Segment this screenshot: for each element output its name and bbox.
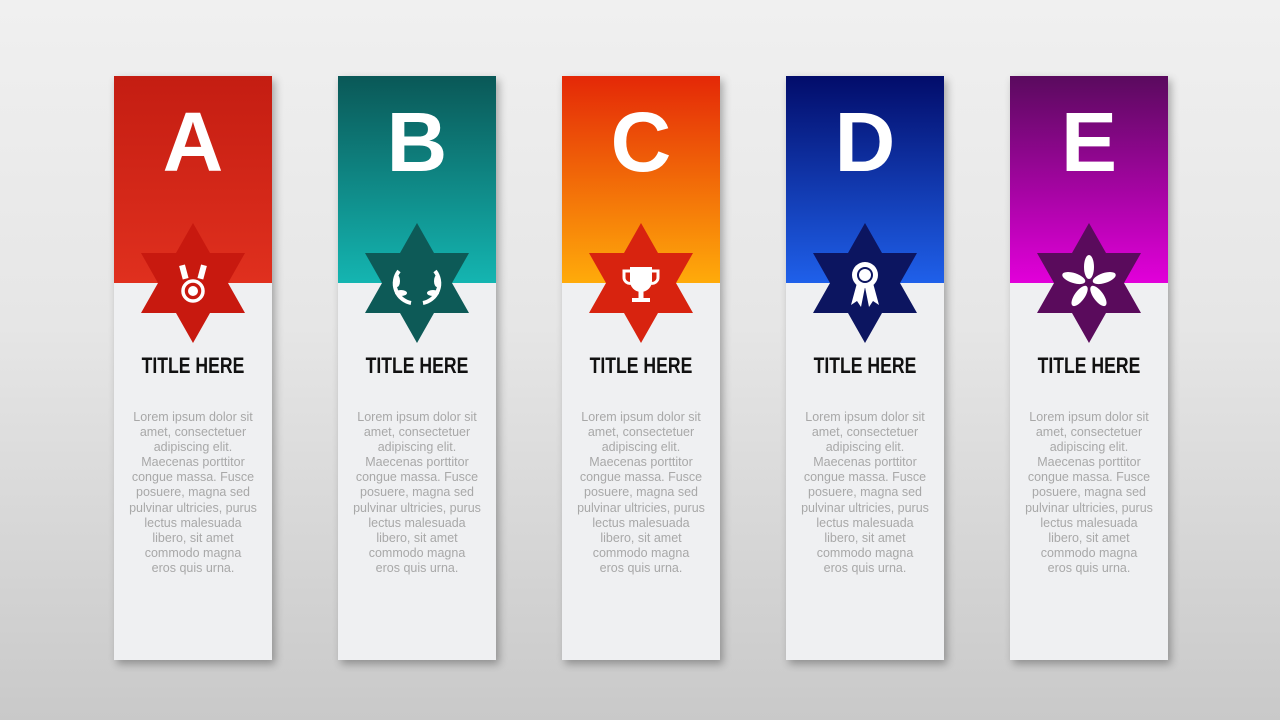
text D xyxy=(801,410,929,575)
text C: Maecenas porttitor xyxy=(589,455,693,469)
text C: amet, consectetuer xyxy=(588,425,694,439)
title E: TITLE HERE xyxy=(1038,353,1140,378)
card C xyxy=(562,76,720,660)
text D: amet, consectetuer xyxy=(812,425,918,439)
text A: Lorem ipsum dolor sit xyxy=(133,410,253,424)
text C: Lorem ipsum dolor sit xyxy=(581,410,701,424)
letter C: C xyxy=(611,95,671,189)
text C: eros quis urna. xyxy=(600,561,682,575)
letter B: B xyxy=(387,95,447,189)
text B: libero, sit amet xyxy=(376,531,458,545)
card A xyxy=(114,76,272,660)
header E xyxy=(1010,76,1168,283)
text D: posuere, magna sed xyxy=(808,485,922,499)
text A: amet, consectetuer xyxy=(140,425,246,439)
text A: eros quis urna. xyxy=(152,561,234,575)
text E: commodo magna xyxy=(1041,546,1137,560)
text C: posuere, magna sed xyxy=(584,485,698,499)
title B: TITLE HERE xyxy=(366,353,468,378)
text A: Maecenas porttitor xyxy=(141,455,245,469)
text D: eros quis urna. xyxy=(824,561,906,575)
text A: pulvinar ultricies, purus xyxy=(129,501,257,515)
header C xyxy=(562,76,720,283)
letter D: D xyxy=(835,95,895,189)
icon: star medal xyxy=(141,224,245,343)
text D: lectus malesuada xyxy=(816,516,914,530)
text E: posuere, magna sed xyxy=(1032,485,1146,499)
text B: eros quis urna. xyxy=(376,561,458,575)
title D: TITLE HERE xyxy=(814,353,916,378)
letter E: E xyxy=(1061,95,1117,189)
text A: adipiscing elit. xyxy=(154,440,232,454)
card B xyxy=(338,76,496,660)
text B: lectus malesuada xyxy=(368,516,466,530)
text C: pulvinar ultricies, purus xyxy=(577,501,705,515)
text D: Lorem ipsum dolor sit xyxy=(805,410,925,424)
icon: star rosette xyxy=(813,223,917,343)
text B: Maecenas porttitor xyxy=(365,455,469,469)
text D: Maecenas porttitor xyxy=(813,455,917,469)
text B: Lorem ipsum dolor sit xyxy=(357,410,477,424)
letter A: A xyxy=(163,95,223,189)
text B: adipiscing elit. xyxy=(378,440,456,454)
card E xyxy=(1010,76,1168,660)
text A: congue massa. Fusce xyxy=(132,470,254,484)
text D: libero, sit amet xyxy=(824,531,906,545)
text E: amet, consectetuer xyxy=(1036,425,1142,439)
text E: eros quis urna. xyxy=(1048,561,1130,575)
text E: lectus malesuada xyxy=(1040,516,1138,530)
text C: libero, sit amet xyxy=(600,531,682,545)
text B: pulvinar ultricies, purus xyxy=(353,501,481,515)
text B xyxy=(353,410,481,575)
header A xyxy=(114,76,272,283)
title A: TITLE HERE xyxy=(142,353,244,378)
text A: posuere, magna sed xyxy=(136,485,250,499)
text E: libero, sit amet xyxy=(1048,531,1130,545)
text A: lectus malesuada xyxy=(144,516,242,530)
text B: congue massa. Fusce xyxy=(356,470,478,484)
card D xyxy=(786,76,944,660)
text C: lectus malesuada xyxy=(592,516,690,530)
title C: TITLE HERE xyxy=(590,353,692,378)
text A: libero, sit amet xyxy=(152,531,234,545)
icon: star laurel xyxy=(365,223,469,343)
text E: adipiscing elit. xyxy=(1050,440,1128,454)
text D: congue massa. Fusce xyxy=(804,470,926,484)
text E xyxy=(1025,410,1153,575)
text D: commodo magna xyxy=(817,546,913,560)
header D xyxy=(786,76,944,283)
icon: star trophy xyxy=(589,223,693,343)
text D: pulvinar ultricies, purus xyxy=(801,501,929,515)
text E: Maecenas porttitor xyxy=(1037,455,1141,469)
text C: commodo magna xyxy=(593,546,689,560)
text A: commodo magna xyxy=(145,546,241,560)
text E: pulvinar ultricies, purus xyxy=(1025,501,1153,515)
text B: amet, consectetuer xyxy=(364,425,470,439)
text B: posuere, magna sed xyxy=(360,485,474,499)
text E: congue massa. Fusce xyxy=(1028,470,1150,484)
text B: commodo magna xyxy=(369,546,465,560)
icon: star hands xyxy=(1037,223,1141,343)
text C: adipiscing elit. xyxy=(602,440,680,454)
text C: congue massa. Fusce xyxy=(580,470,702,484)
text E: Lorem ipsum dolor sit xyxy=(1029,410,1149,424)
text D: adipiscing elit. xyxy=(826,440,904,454)
header B xyxy=(338,76,496,283)
text A xyxy=(129,410,257,575)
text C xyxy=(577,410,705,575)
